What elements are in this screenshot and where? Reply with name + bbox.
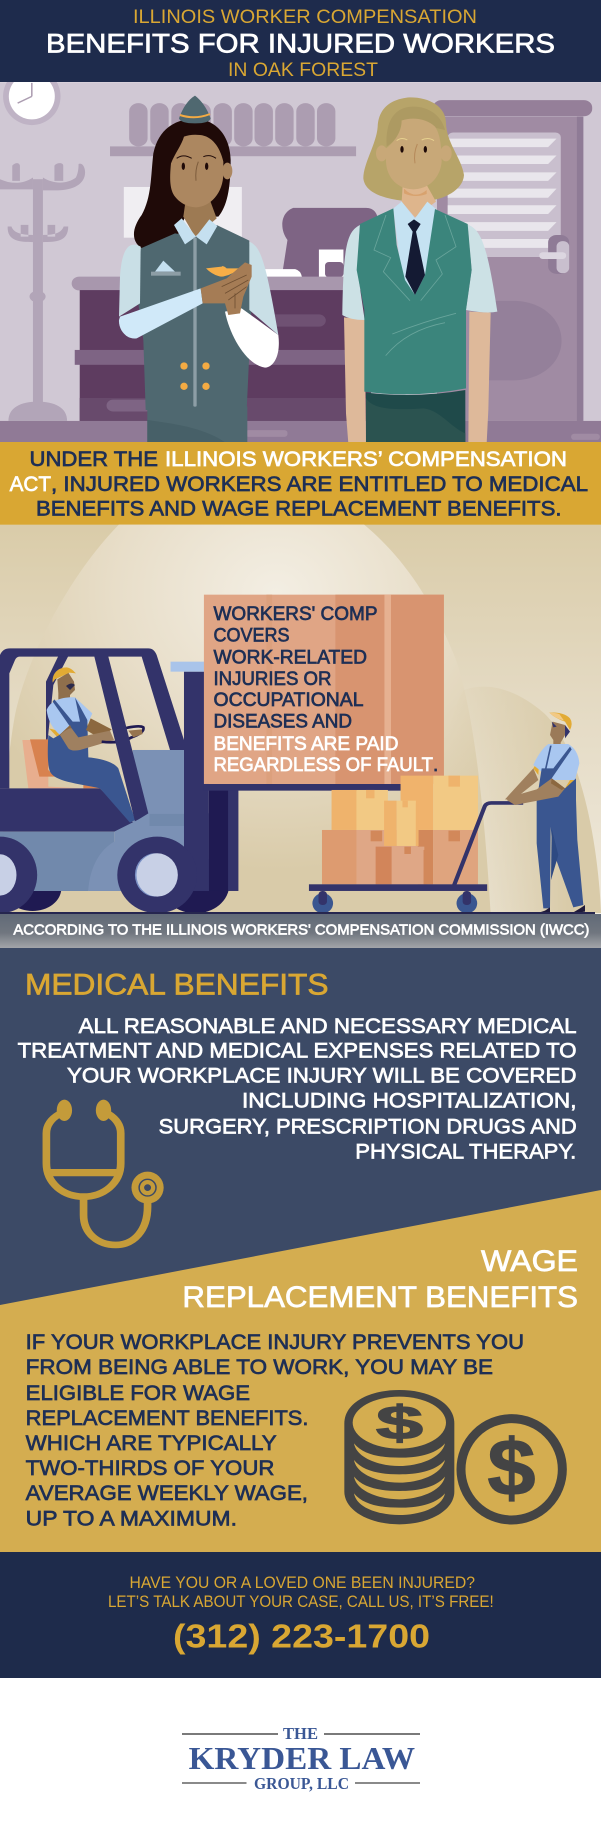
logo: the kryder law group: KRYDER LAW [189, 1740, 415, 1776]
statement text [10, 448, 588, 520]
medical benefits text: INCLUDING HOSPITALIZATION, [242, 1090, 576, 1113]
heading: wage replacement benefits: REPLACEMENT BENEFITS [182, 1281, 578, 1314]
medical benefits text: YOUR WORKPLACE INJURY WILL BE COVERED [67, 1065, 576, 1088]
box text: WORKERS' COMP [214, 604, 378, 625]
box text: WORK-RELATED [214, 647, 367, 668]
forklift body [0, 813, 209, 891]
medical benefits text [18, 1015, 577, 1164]
forklift driver [47, 667, 144, 823]
icon: stethoscope [46, 1100, 164, 1245]
icon: coins [344, 1390, 562, 1524]
wage replacement text: FROM BEING ABLE TO WORK, YOU MAY BE [26, 1356, 493, 1379]
forklift wheels [0, 837, 197, 913]
logo: the kryder law group: GROUP, LLC [254, 1774, 349, 1793]
statement text: ACT [10, 473, 51, 496]
box text: OCCUPATIONAL [214, 690, 364, 711]
source bar: ACCORDING TO THE ILLINOIS WORKERS' COMPENSATION COMMISSION (IWCC) [13, 921, 589, 938]
figure: woman in grey uniform [119, 96, 279, 443]
illustration: warehouse with forklift [0, 525, 601, 913]
shelf with binders [110, 103, 356, 156]
coat rack [0, 163, 85, 421]
logo: the kryder law group [182, 1724, 420, 1793]
box text: COVERS [214, 626, 290, 647]
forklift front body, wheels, boxes and cart [0, 595, 523, 913]
statement text: UNDER THE [30, 448, 158, 471]
medical benefits text: ALL REASONABLE AND NECESSARY MEDICAL [79, 1015, 577, 1038]
forklift cab and driver [0, 648, 184, 832]
call to action [0, 1552, 601, 1678]
reception room background [0, 68, 601, 442]
header line: in oak forest: IN OAK FOREST [228, 59, 378, 81]
box text [214, 604, 438, 776]
paper notice on wall [124, 187, 242, 238]
reception desk [72, 250, 371, 422]
header line: illinois worker compensation: ILLINOIS WORKER COMPENSATION [133, 6, 477, 28]
heading: medical benefits: MEDICAL BENEFITS [25, 968, 328, 1001]
boxes on cart [322, 776, 478, 884]
medical benefits text: PHYSICAL THERAPY. [355, 1141, 576, 1164]
wage replacement text [26, 1331, 524, 1531]
worker pushing cart [505, 713, 585, 913]
header banner [0, 0, 601, 82]
heading: wage replacement benefits: WAGE [481, 1245, 578, 1278]
wage replacement text: ELIGIBLE FOR WAGE [26, 1382, 250, 1405]
warehouse background and rear forklift parts [0, 525, 601, 913]
box text: REGARDLESS OF FAULT [214, 755, 433, 776]
illustration: hotel reception with two workers [0, 68, 601, 443]
panel: medical benefits background [0, 948, 601, 1318]
call to action text: LET’S TALK ABOUT YOUR CASE, CALL US, IT’S FREE! [108, 1593, 494, 1611]
floor [0, 421, 601, 442]
phone number: (312) 223-1700 [173, 1618, 430, 1655]
medical benefits text: TREATMENT AND MEDICAL EXPENSES RELATED TO [18, 1040, 577, 1063]
gold statement band [0, 442, 601, 525]
reception chair [282, 208, 378, 277]
figure: blonde woman in green vest [342, 97, 497, 443]
panel: wage replacement benefits [26, 1245, 578, 1531]
panel: wage replacement background [0, 1190, 601, 1552]
icon: coins: $ [376, 1396, 423, 1449]
source bar [0, 912, 601, 948]
icon: wall clock [3, 68, 61, 125]
hand cart [309, 803, 523, 913]
icon: coins: $ [488, 1423, 536, 1512]
title: BENEFITS FOR INJURED WORKERS [46, 28, 555, 58]
box text: INJURIES OR [214, 669, 332, 690]
statement text: BENEFITS AND WAGE REPLACEMENT BENEFITS. [36, 498, 562, 520]
wage replacement text: REPLACEMENT BENEFITS. [26, 1407, 308, 1430]
box text: . [433, 755, 438, 776]
box text: DISEASES AND [214, 712, 352, 733]
wage replacement text: UP TO A MAXIMUM. [26, 1508, 237, 1531]
heading: wage replacement benefits [182, 1245, 578, 1314]
panel: medical benefits [18, 968, 577, 1245]
statement text: , INJURED WORKERS ARE ENTITLED TO MEDICAL [51, 473, 588, 496]
wage replacement text: WHICH ARE TYPICALLY [26, 1432, 277, 1455]
box text: BENEFITS ARE PAID [214, 734, 398, 755]
large box with forks [204, 595, 444, 791]
call to action text [108, 1574, 494, 1611]
door and blinds [433, 100, 592, 421]
medical benefits text: SURGERY, PRESCRIPTION DRUGS AND [159, 1116, 577, 1139]
wage replacement text: AVERAGE WEEKLY WAGE, [26, 1482, 308, 1505]
statement text: ILLINOIS WORKERS’ COMPENSATION [165, 448, 567, 471]
wage replacement text: IF YOUR WORKPLACE INJURY PREVENTS YOU [26, 1331, 524, 1354]
wage replacement text: TWO-THIRDS OF YOUR [26, 1457, 274, 1480]
call to action text: HAVE YOU OR A LOVED ONE BEEN INJURED? [130, 1574, 475, 1592]
logo: the kryder law group: THE [283, 1724, 318, 1743]
